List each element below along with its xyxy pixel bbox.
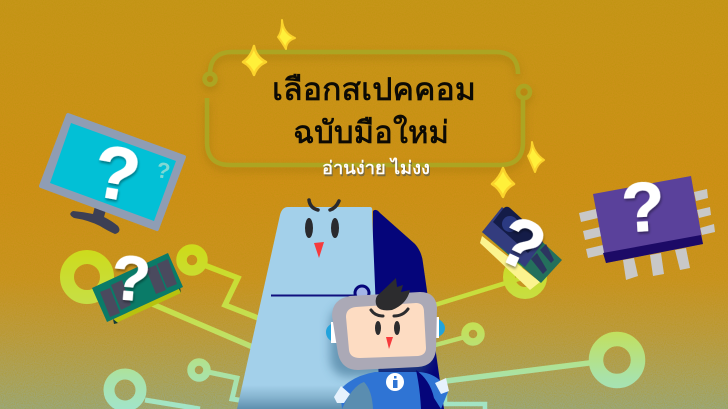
- chip body: [593, 176, 703, 263]
- fan: [502, 216, 518, 232]
- sparkle 4: [492, 168, 514, 197]
- left glove: [334, 386, 350, 403]
- face: [346, 303, 426, 358]
- left headphone: [326, 322, 336, 343]
- sparkle 2: [243, 46, 266, 75]
- eyes: [375, 321, 381, 335]
- hair: [376, 278, 410, 310]
- eyes: [305, 218, 313, 238]
- fridge body: [237, 207, 380, 409]
- body: [340, 372, 448, 409]
- fridge door dark side: [370, 210, 444, 409]
- RAM icon: [92, 242, 183, 324]
- blue cooler: [482, 207, 543, 267]
- RAM tabs: [113, 287, 181, 324]
- yellow edge connector: [480, 236, 540, 290]
- monitor screen: [50, 123, 176, 221]
- RAM board: [92, 253, 183, 322]
- question mark: ?: [109, 242, 153, 316]
- title line 2: ฉบับมือใหม่: [293, 115, 449, 150]
- inner arm gap: [342, 382, 373, 409]
- graphics card icon: [480, 201, 562, 290]
- memory slots: [540, 244, 554, 263]
- title frame: [204, 52, 530, 165]
- sparkles: [243, 20, 544, 197]
- sparkle 3: [528, 142, 544, 172]
- monitor stand: [70, 206, 119, 234]
- RAM contact strip: [113, 286, 181, 323]
- question mark: ?: [487, 201, 556, 287]
- RAM chips: [100, 259, 177, 317]
- fridge handle: [355, 286, 369, 300]
- circuit lines: [67, 250, 638, 409]
- question mark: ?: [620, 167, 666, 247]
- brows: [371, 309, 408, 316]
- eyebrows: [309, 200, 339, 210]
- monitor icon: [41, 115, 184, 234]
- title line 1: เลือกสเปคคอม: [272, 72, 476, 107]
- CPU chip icon: [579, 167, 715, 280]
- robot character: [326, 278, 449, 409]
- cape: [416, 370, 441, 409]
- question mark: ?: [87, 129, 146, 218]
- green board: [482, 212, 562, 283]
- sparkle 1: [278, 20, 295, 49]
- fridge door line: [271, 294, 360, 296]
- right glove: [435, 378, 449, 394]
- mouth: [314, 242, 324, 258]
- subtitle: อ่านง่าย ไม่งง: [322, 157, 430, 178]
- title: [272, 72, 476, 150]
- chip edge: [603, 235, 703, 263]
- cooler top: [493, 207, 543, 253]
- fridge character: [237, 200, 444, 409]
- logo: [386, 373, 404, 391]
- shadow: [330, 305, 430, 377]
- monitor frame: [41, 115, 184, 229]
- logo glyph: [393, 376, 398, 388]
- mouth: [386, 337, 393, 349]
- pins: [579, 189, 715, 280]
- small question mark: ?: [154, 157, 172, 184]
- right headphone: [435, 317, 445, 338]
- head: [332, 292, 437, 370]
